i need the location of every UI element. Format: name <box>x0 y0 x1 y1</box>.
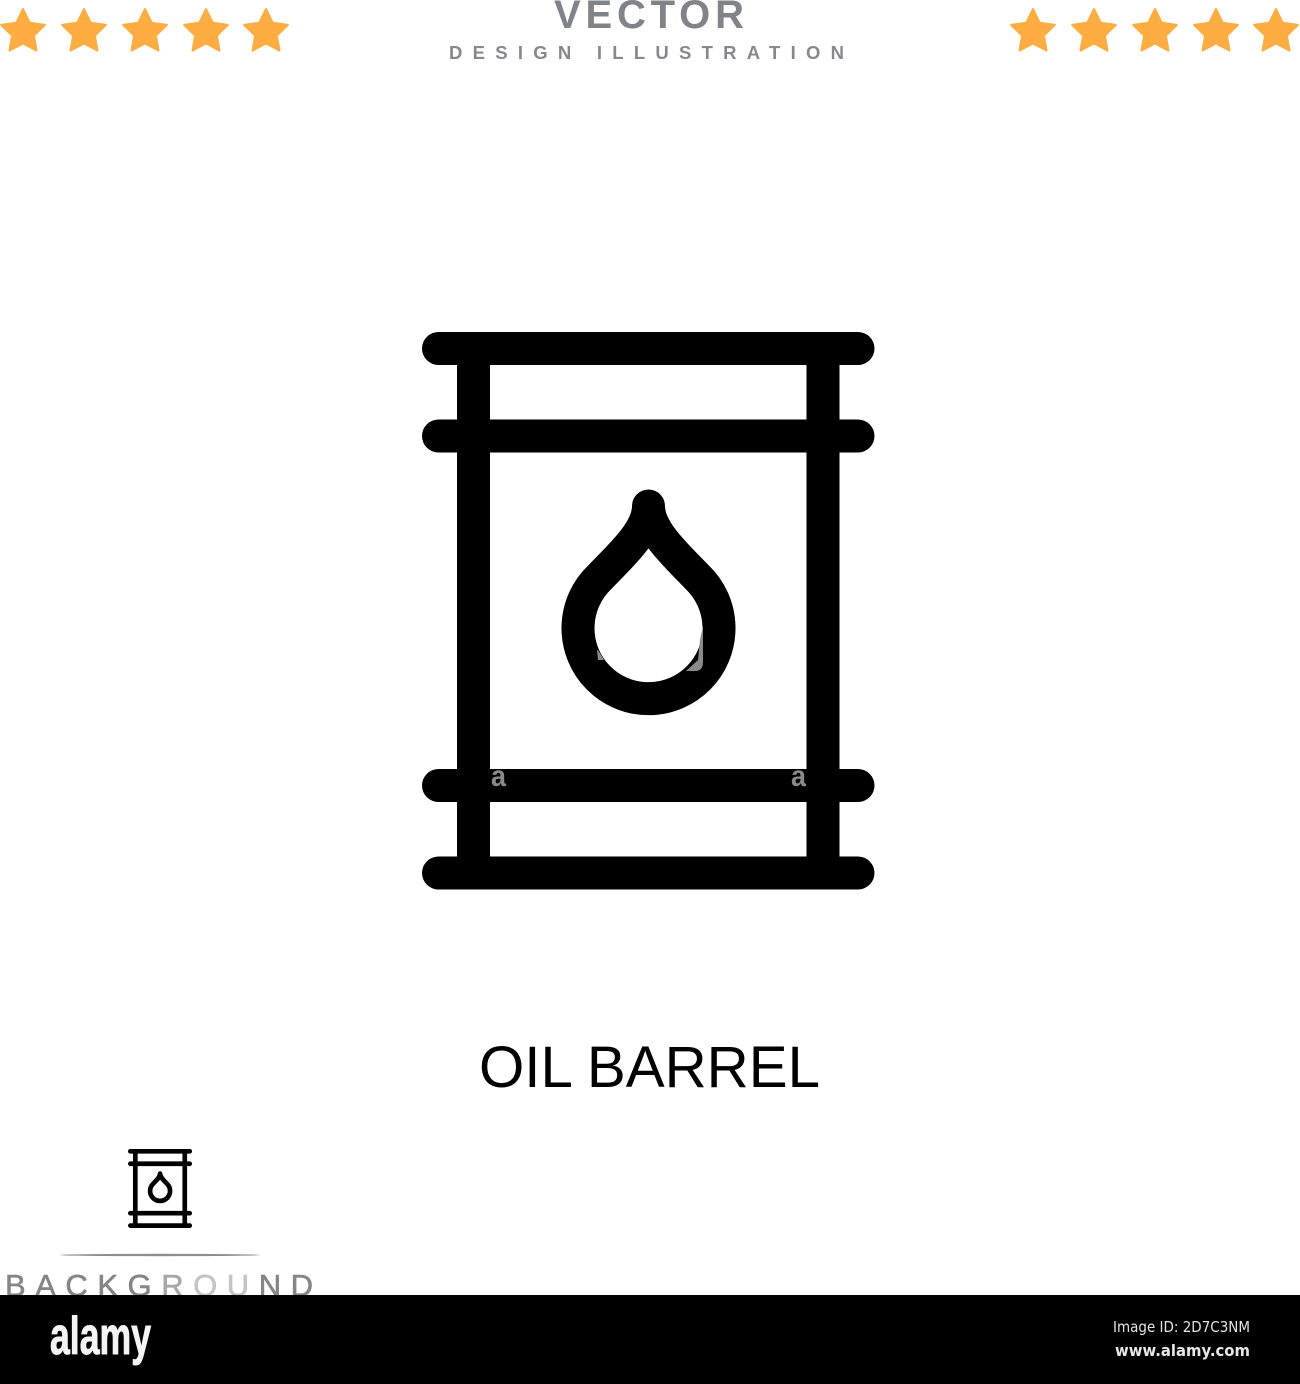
image id: Image ID: 2D7C3NM <box>1113 1318 1250 1336</box>
subheading: design illustration: DESIGN ILLUSTRATION <box>449 42 844 63</box>
main icon: oil barrel <box>438 348 858 873</box>
footer bar <box>0 1295 1300 1384</box>
alamy logo: alamy <box>50 1307 151 1366</box>
background divider <box>60 1254 260 1256</box>
watermark fragment inside drop <box>597 626 703 671</box>
website: www.alamy.com <box>1115 1341 1250 1360</box>
watermark fragment right: a <box>791 760 806 793</box>
right star rating <box>1011 9 1298 51</box>
icon title: OIL BARREL <box>479 1035 820 1100</box>
left star rating <box>1 9 288 51</box>
background label: BACKG R OU ND <box>5 1268 313 1303</box>
watermark fragment left: a <box>491 760 506 793</box>
small icon: oil barrel <box>130 1151 190 1226</box>
